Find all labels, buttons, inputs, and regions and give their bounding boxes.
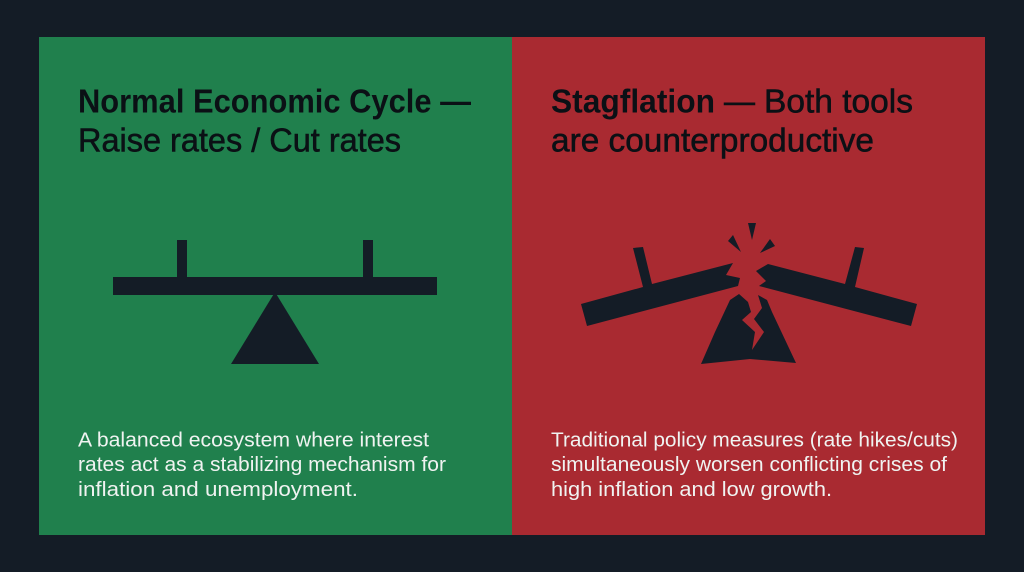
text: normal cycle description: inflation and unemployment. bbox=[78, 478, 358, 501]
heading: normal economic cycle bbox=[78, 82, 471, 158]
icon: broken seesaw bbox=[581, 223, 917, 364]
text: stagflation description: simultaneously worsen conflicting crises of bbox=[551, 453, 947, 476]
heading: stagflation: are counterproductive bbox=[551, 122, 874, 158]
text: normal cycle description bbox=[78, 429, 446, 501]
text: normal cycle description: A balanced ecosystem where interest bbox=[78, 429, 429, 452]
heading: stagflation bbox=[551, 82, 913, 158]
heading: normal economic cycle: Normal Economic Cycle — bbox=[78, 82, 471, 120]
text: stagflation description: high inflation and low growth. bbox=[551, 478, 832, 501]
heading: stagflation: Stagflation bbox=[551, 82, 715, 120]
text: stagflation description bbox=[551, 429, 958, 501]
heading: normal economic cycle: Raise rates / Cut rates bbox=[78, 122, 401, 158]
panel: normal economic cycle bbox=[39, 37, 512, 535]
icon: balanced seesaw bbox=[113, 240, 437, 364]
heading: stagflation: — bbox=[724, 82, 755, 120]
panel: stagflation bbox=[512, 37, 985, 535]
text: stagflation description: Traditional policy measures (rate hikes/cuts) bbox=[551, 429, 958, 452]
text: normal cycle description: rates act as a stabilizing mechanism for bbox=[78, 453, 446, 476]
heading: stagflation: Both tools bbox=[764, 82, 913, 120]
